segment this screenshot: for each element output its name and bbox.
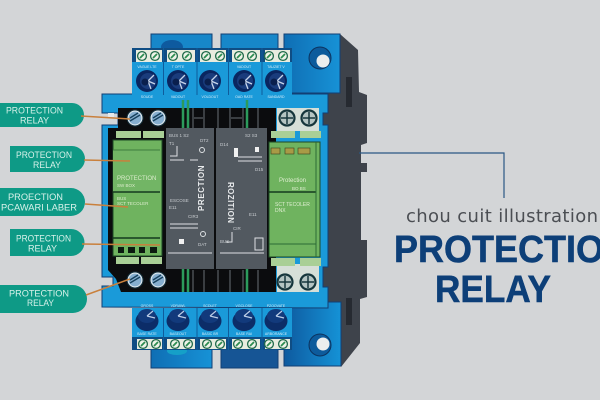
gray control panel right: BUS bbox=[220, 239, 229, 244]
top terminal modules bbox=[132, 48, 292, 99]
bottom terminal modules: BASIC BR bbox=[202, 332, 219, 336]
subtitle: chou cuit illustration bbox=[406, 206, 598, 227]
callout: protection relay 1: RELAY bbox=[20, 116, 50, 126]
callout: protection relay 2: PROTECTION bbox=[16, 150, 72, 161]
top hub behind terminals bbox=[161, 40, 183, 54]
gray control panel left bbox=[166, 128, 214, 269]
callout: protection relay 5: PROTECTION bbox=[9, 288, 69, 300]
callout: protection relay 1: PROTECTION bbox=[6, 106, 63, 116]
gray control panel right: E11 bbox=[249, 212, 257, 217]
top mounting tabs bbox=[151, 34, 340, 93]
top-left ledge clip bbox=[108, 113, 114, 117]
top terminal modules: VADOUT bbox=[237, 65, 252, 69]
gray control panel left: CIR3 bbox=[188, 214, 199, 219]
top terminal modules: SOUDE bbox=[141, 95, 154, 99]
left green relay module: SCT TECOLER bbox=[117, 201, 149, 206]
bottom mounting hole bbox=[309, 334, 331, 356]
top terminal modules: SANDARD bbox=[267, 95, 285, 99]
left green relay module: SW BOX bbox=[117, 183, 135, 188]
arrow: callout 3 bbox=[85, 204, 128, 207]
bottom hub behind terminals bbox=[167, 347, 187, 355]
left green relay module bbox=[113, 131, 164, 264]
arrow: callout 2 bbox=[84, 160, 130, 161]
bottom terminal modules: PZOOVATE bbox=[267, 304, 286, 308]
top terminal modules: T OPTE bbox=[172, 65, 185, 69]
bottom terminal modules: BASE RAI bbox=[236, 332, 252, 336]
callout: protection relay 4 bbox=[10, 229, 84, 256]
callout: protection relay 4: PROTECTION bbox=[16, 234, 71, 244]
bottom terminal modules: VDRAWL bbox=[171, 304, 185, 308]
gray control panel right: ROZITION bbox=[226, 182, 235, 223]
gray control panel left: E11 bbox=[169, 205, 177, 210]
gray control panel left: PRECTION bbox=[197, 165, 206, 211]
bottom terminal modules: ARBORANCE bbox=[265, 332, 288, 336]
inner black chassis bbox=[108, 108, 276, 292]
top mounting hole bbox=[309, 47, 331, 69]
leader line to heading bbox=[359, 153, 504, 198]
gray control panel left: BUS 1 S2 bbox=[169, 133, 189, 138]
chassis frame bars bbox=[193, 108, 258, 292]
arrow: callout 5 bbox=[86, 279, 130, 295]
callout: protection relay 2: RELAY bbox=[33, 160, 62, 171]
bottom terminal modules: VGCLOSE bbox=[236, 304, 253, 308]
right green relay module bbox=[269, 131, 321, 266]
callout: protection cawari laber bbox=[0, 188, 85, 216]
gray control panel left: T1 bbox=[169, 141, 175, 146]
callout: protection relay 5 bbox=[0, 285, 87, 313]
bottom terminal modules: SCDLET bbox=[203, 304, 218, 308]
left green relay module: PROTECTION bbox=[117, 176, 156, 182]
gray control panel right bbox=[216, 128, 267, 269]
main blue body bbox=[102, 94, 328, 308]
arrow: callout 4 bbox=[82, 244, 160, 245]
housing slots bbox=[346, 77, 352, 325]
gray control panel left: DT2 bbox=[200, 138, 209, 143]
left green relay module: BUS bbox=[117, 196, 126, 201]
right green relay module: Protection bbox=[279, 178, 306, 184]
right green relay module: DNX bbox=[275, 208, 286, 214]
gray control panel left: ESCOSE bbox=[170, 198, 189, 203]
title bbox=[394, 229, 600, 311]
bottom terminal modules: BASEOUT bbox=[170, 332, 187, 336]
relay side housing bbox=[320, 34, 367, 367]
gray control panel left: DAT bbox=[198, 242, 207, 247]
callout: protection cawari laber: PROECTION bbox=[8, 192, 63, 203]
callout: protection relay 5: RELAY bbox=[27, 298, 55, 309]
right green relay module: SCT TECOLER bbox=[275, 202, 310, 208]
title: RELAY bbox=[435, 269, 551, 311]
bottom mounting tabs bbox=[151, 302, 341, 368]
left screw terminals top bbox=[127, 110, 166, 126]
gray control panel right: D14 bbox=[220, 142, 229, 147]
gray control panel right: S2 S3 bbox=[245, 133, 258, 138]
bus bars bbox=[183, 100, 247, 292]
bottom terminal modules: GROSS bbox=[141, 304, 154, 308]
right terminal block bottom bbox=[277, 264, 319, 292]
top terminal modules: VADOUT bbox=[171, 95, 186, 99]
bottom terminal modules: BASE RATE bbox=[137, 332, 157, 336]
top terminal modules: OAD RATE bbox=[235, 95, 253, 99]
callout: protection relay 4: RELAY bbox=[28, 244, 58, 254]
gray control panel right: D15 bbox=[255, 167, 264, 172]
callout: protection cawari laber: PCAWARI LABER bbox=[1, 202, 77, 214]
callout: protection relay 2 bbox=[10, 146, 85, 172]
arrow: callout 1 bbox=[81, 116, 130, 119]
gray control panel right: CIR bbox=[233, 226, 242, 231]
top terminal modules: VOLDOUT bbox=[202, 95, 219, 99]
left screw terminals bottom bbox=[127, 272, 166, 288]
right terminal block top bbox=[277, 108, 319, 131]
right green relay module: BO BS bbox=[292, 186, 306, 191]
callout: protection relay 1 bbox=[0, 103, 84, 127]
top terminal modules: TAUZIET V bbox=[267, 65, 285, 69]
bottom terminal modules bbox=[132, 304, 292, 350]
top terminal modules: VAGUE LTE bbox=[137, 65, 157, 69]
